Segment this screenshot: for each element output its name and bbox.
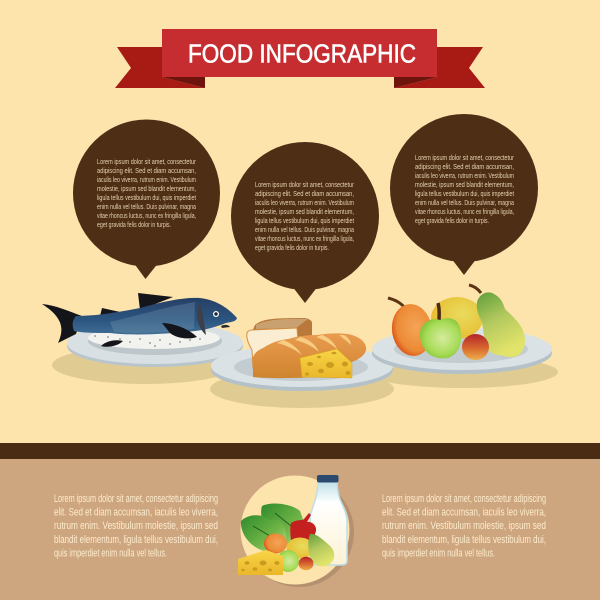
icon: fish <box>42 293 237 347</box>
icon: food group circle <box>238 475 354 587</box>
speech bubble: bread and cheese text: Lorem ipsum dolor sit amet, consectetur <box>255 180 354 189</box>
speech bubble: fruit text <box>390 114 538 275</box>
text block: lower right <box>382 493 546 559</box>
icon: peach <box>388 298 435 359</box>
icon: green apple <box>277 550 299 572</box>
title ribbon <box>115 29 485 88</box>
icon: pear <box>308 534 334 566</box>
icon: lettuce <box>241 504 304 552</box>
speech bubble: fruit text: molestie, ipsum sed blandit elementum, <box>415 180 514 189</box>
icon: lemon <box>286 538 314 558</box>
icon: small red apple <box>298 557 314 570</box>
speech bubble: bread and cheese text: adipiscing elit. Sed et diam accumsan, <box>255 189 354 198</box>
icon: green apple <box>420 303 461 358</box>
icon: milk bottle <box>310 475 347 565</box>
speech bubble: fish text: enim nulla vel tellus. Duis pulvinar, magna <box>97 202 196 211</box>
speech bubble: fruit text: adipiscing elit. Sed et diam accumsan, <box>415 162 514 171</box>
speech bubble: fish text: iaculis leo viverra, rutrum enim. Vestibulum <box>97 175 196 184</box>
icon: small red apple <box>462 334 489 360</box>
icon: peach <box>264 534 287 554</box>
speech bubble: fish text: molestie, ipsum sed blandit elementum, <box>97 184 196 193</box>
dark brown divider band <box>0 443 600 459</box>
speech bubble: bread and cheese text: enim nulla vel tellus. Duis pulvinar, magna <box>255 225 354 234</box>
text block: lower left: rutrum enim. Vestibulum molestie, ipsum sed <box>54 520 218 532</box>
title: FOOD INFOGRAPHIC <box>188 38 416 68</box>
speech bubble: fruit text: ligula tellus vestibulum dui, quis imperdiet <box>415 189 514 198</box>
icon: pear <box>469 285 525 357</box>
text block: lower left <box>54 493 218 559</box>
icon: cheese wedge <box>300 349 352 378</box>
plate with fish <box>42 293 243 367</box>
icon: lemon <box>431 297 483 339</box>
plate shadows <box>52 346 558 408</box>
speech bubble: fruit text: enim nulla vel tellus. Duis pulvinar, magna <box>415 198 514 207</box>
text block: lower left: Lorem ipsum dolor sit amet, consectetur adipiscing <box>54 493 218 505</box>
icon: cheese wedge <box>238 550 283 575</box>
speech bubble: fruit text: eget gravida felis dolor in turpis. <box>415 216 489 225</box>
speech bubble: bread and cheese text: eget gravida felis dolor in turpis. <box>255 243 329 252</box>
speech bubble: fish text: Lorem ipsum dolor sit amet, consectetur <box>97 157 196 166</box>
text block: lower left: elit. Sed et diam accumsan, iaculis leo viverra, <box>54 507 218 519</box>
text block: lower right: rutrum enim. Vestibulum molestie, ipsum sed <box>382 520 546 532</box>
speech bubble: bread and cheese text: molestie, ipsum sed blandit elementum, <box>255 207 354 216</box>
icon: bread slice and loaf <box>247 318 366 378</box>
speech bubble: bread and cheese text: ligula tellus vestibulum dui, quis imperdiet <box>255 216 354 225</box>
speech bubble: fish text: eget gravida felis dolor in turpis. <box>97 220 171 229</box>
text block: lower right: quis imperdiet enim nulla vel tellus. <box>382 547 495 559</box>
speech bubble: fish text: ligula tellus vestibulum dui, quis imperdiet <box>97 193 196 202</box>
background: tan lower panel <box>0 459 600 600</box>
speech bubble: bread and cheese text <box>231 142 379 303</box>
speech bubble: bread and cheese text: vitae rhoncus luctus, nunc ex fringilla ligula, <box>255 234 354 243</box>
speech bubble: fruit text: vitae rhoncus luctus, nunc ex fringilla ligula, <box>415 207 514 216</box>
background: cream panel <box>0 0 600 443</box>
plate with bread and cheese <box>211 318 393 391</box>
plate with fruit <box>372 285 552 374</box>
speech bubble: fish text: adipiscing elit. Sed et diam accumsan, <box>97 166 196 175</box>
text block: lower left: blandit elementum, ligula tellus vestibulum dui, <box>54 534 218 546</box>
icon: red pepper <box>290 513 316 540</box>
speech bubble: fruit text: iaculis leo viverra, rutrum enim. Vestibulum <box>415 171 514 180</box>
speech bubble: bread and cheese text: iaculis leo viverra, rutrum enim. Vestibulum <box>255 198 354 207</box>
speech bubble: fish text <box>73 120 220 279</box>
text block: lower left: quis imperdiet enim nulla vel tellus. <box>54 547 167 559</box>
speech bubble: fish text: vitae rhoncus luctus, nunc ex fringilla ligula, <box>97 211 196 220</box>
speech bubble: fruit text: Lorem ipsum dolor sit amet, consectetur <box>415 153 514 162</box>
